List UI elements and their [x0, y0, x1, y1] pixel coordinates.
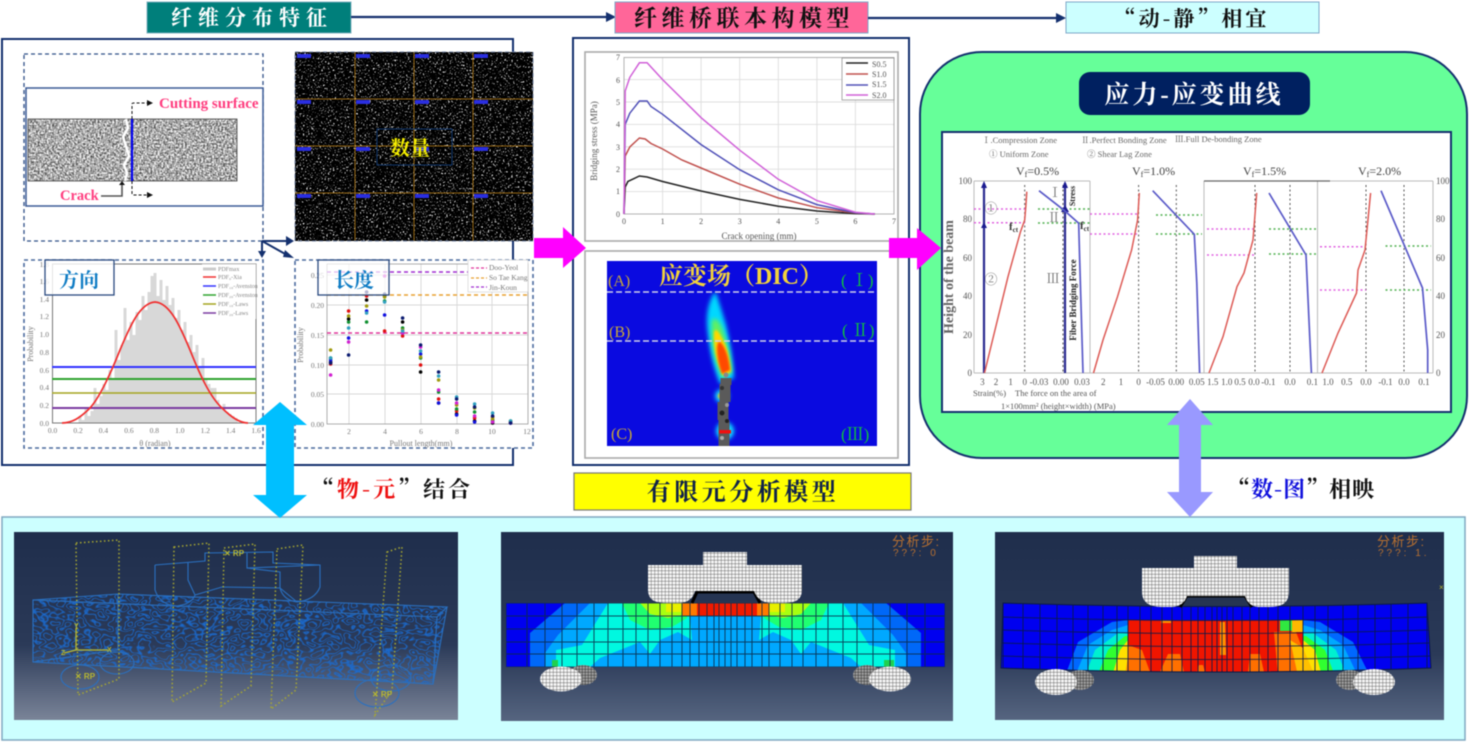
heading: fiber bridging constitutive model: 纤维桥联本构模型 [634, 6, 854, 31]
chart: length probability: 0.20 [311, 301, 324, 310]
chart: orientation probability: 1.0 [40, 330, 49, 339]
chart: height of the beam vs strain: f [1009, 221, 1013, 233]
chart: height of the beam vs strain: Ⅰ.Compression Zone [982, 135, 1057, 145]
chart: orientation probability: 1.4 [40, 295, 49, 304]
arrow: to bridging model [351, 12, 616, 22]
chart: orientation probability: 0.2 [73, 426, 83, 435]
chart: length probability: 0.00 [311, 420, 324, 429]
image: fiber wireframe model: Z [61, 650, 66, 657]
chart: height of the beam vs strain: 0.5 [1234, 377, 1246, 387]
label: quantity [377, 129, 452, 165]
label: length: 长度 [334, 268, 374, 292]
image: fiber wireframe model: Y [74, 623, 79, 630]
chart: height of the beam vs strain: =2.0% [1369, 164, 1401, 178]
chart: length probability: 12 [523, 427, 531, 436]
heading: stress strain curve: 应力-应变曲线 [1104, 80, 1284, 109]
chart: height of the beam vs strain: Ⅲ [1046, 271, 1060, 286]
chart: length probability: 4 [383, 427, 387, 436]
image: fiber wireframe model: ✕ RP [75, 672, 96, 681]
chart: bridging stress vs crack opening: 7 [616, 53, 620, 62]
chart: orientation probability: PDF₂₀-Avenston [218, 293, 258, 299]
chart: height of the beam vs strain: Fiber Bridging Force [1068, 259, 1078, 341]
chart: height of the beam vs strain [942, 132, 1451, 412]
heading: dynamic static: “动-静”相宜 [1115, 3, 1269, 33]
chart: orientation probability: PDF₂₀-Laws [218, 311, 249, 317]
panel: finite element models [2, 517, 1465, 740]
chart: length probability: 2 [347, 427, 351, 436]
chart: orientation probability: 0.4 [99, 426, 108, 435]
chart: height of the beam vs strain: 1.0 [1322, 377, 1334, 387]
chart: height of the beam vs strain: 0.00 [1053, 377, 1069, 387]
chart: orientation probability: 0.8 [150, 426, 159, 435]
image: fiber wireframe model [14, 532, 458, 720]
chart: length probability: So Tae Kang [489, 273, 528, 282]
chart: height of the beam vs strain: The force on the area of [1015, 388, 1097, 398]
chart: height of the beam vs strain: 60 [963, 253, 972, 263]
heading: stress strain curve [1079, 72, 1310, 115]
chart: bridging stress vs crack opening: S0.5 [872, 60, 886, 69]
chart: bridging stress vs crack opening: 0 [622, 217, 626, 226]
chart: bridging stress vs crack opening: 0 [616, 210, 620, 219]
chart: height of the beam vs strain: =0.5% [1027, 164, 1059, 178]
chart: bridging stress vs crack opening: 3 [616, 143, 620, 152]
chart: height of the beam vs strain: f [1367, 170, 1370, 179]
chart: height of the beam vs strain: ② [984, 272, 998, 287]
chart: height of the beam vs strain: Ⅲ.Full De-bonding Zone [1175, 134, 1262, 144]
chart: length probability: 6 [419, 427, 423, 436]
chart: length probability: 8 [455, 427, 459, 436]
chart: length probability: 0.15 [311, 331, 324, 340]
diagram: cutting surface and crack: Cutting surface [159, 96, 259, 112]
chart: height of the beam vs strain: Strain(%) [973, 388, 1006, 398]
chart: orientation probability: Probability [26, 326, 35, 362]
image: FE model final step: × [1439, 583, 1444, 592]
chart: height of the beam vs strain: Ⅰ [1048, 185, 1062, 200]
image: DIC strain field: (A) [608, 273, 630, 290]
image: DIC strain field [585, 251, 898, 458]
chart: orientation probability: 0.4 [40, 383, 49, 392]
chart: orientation probability: PDF₁₀-Laws [218, 302, 249, 308]
chart: height of the beam vs strain: ② Shear Lag Zone [1087, 149, 1152, 159]
chart: bridging stress vs crack opening: 5 [616, 98, 620, 107]
chart: height of the beam vs strain: 0 [1022, 377, 1027, 387]
chart: orientation probability: PDF₁₀-Avenston [218, 284, 258, 290]
chart: height of the beam vs strain: 1.0 [1221, 377, 1233, 387]
chart: orientation probability [24, 260, 263, 448]
image: fiber wireframe model: ✕ RP [224, 549, 245, 558]
chart: orientation probability: PDFmax [218, 267, 239, 273]
image: FE model final step [995, 532, 1444, 720]
chart: height of the beam vs strain: 60 [1436, 253, 1446, 263]
chart: height of the beam vs strain: 80 [1436, 214, 1446, 224]
chart: height of the beam vs strain: 40 [963, 291, 972, 301]
chart: height of the beam vs strain: 20 [963, 330, 972, 340]
image: fiber wireframe model: ✕ RP [372, 690, 393, 699]
chart: height of the beam vs strain: =1.0% [1143, 164, 1175, 178]
chart: bridging stress vs crack opening: 6 [616, 76, 620, 85]
image: FE model initial step [501, 532, 953, 721]
image: DIC strain field: ( Ⅱ) [842, 321, 875, 340]
label: orientation: 方向 [59, 269, 99, 292]
chart: orientation probability: 0.6 [124, 426, 134, 435]
chart: height of the beam vs strain: Stress [1068, 186, 1077, 206]
chart: height of the beam vs strain: =1.5% [1254, 164, 1286, 178]
chart: height of the beam vs strain: 40 [1436, 291, 1446, 301]
arrows: branching to charts [258, 236, 294, 258]
chart: height of the beam vs strain: 0 [1136, 377, 1141, 387]
chart: height of the beam vs strain: f [1252, 170, 1255, 179]
chart: orientation probability: 1.2 [201, 426, 210, 435]
chart: height of the beam vs strain: ① [984, 201, 998, 216]
chart: height of the beam vs strain: -0.05 [1146, 377, 1165, 387]
chart: length probability: Probability [296, 327, 305, 363]
chart: length probability: Doo-Yeol [489, 263, 518, 272]
chart: height of the beam vs strain: 0.0 [1284, 377, 1296, 387]
chart: height of the beam vs strain: 0.0 [1248, 377, 1260, 387]
chart: orientation probability: 0.6 [40, 366, 49, 375]
heading: fiber distribution [147, 2, 351, 33]
chart: length probability: 0.10 [311, 361, 324, 370]
diagram: cutting surface and crack: Crack [60, 188, 100, 204]
image: FE model final step: 分析步: [1377, 534, 1426, 549]
chart: height of the beam vs strain: 0.1 [1418, 377, 1430, 387]
chart: orientation probability: PDF₀-Xia [218, 275, 242, 281]
chart: height of the beam vs strain: ① Uniform Zone [989, 149, 1049, 159]
chart: orientation probability: 1.8 [40, 260, 49, 269]
chart: orientation probability: 0.0 [40, 419, 49, 428]
panel: fiber distribution [2, 39, 533, 465]
arrow: blue double vertical [253, 402, 307, 518]
image: FE model initial step: 分析步: [892, 534, 941, 549]
chart: height of the beam vs strain: 1×100mm² (height×width) (MPa) [1001, 401, 1116, 411]
chart: height of the beam vs strain: ct [1013, 226, 1019, 234]
arrow: lavender double vertical [1167, 399, 1213, 517]
image: fiber count [295, 52, 533, 241]
chart: bridging stress vs crack opening [585, 52, 898, 241]
chart: height of the beam vs strain: Ⅱ [1047, 210, 1061, 225]
chart: height of the beam vs strain: 0.5 [1341, 377, 1353, 387]
chart: bridging stress vs crack opening: 4 [776, 217, 780, 226]
chart: bridging stress vs crack opening: 6 [853, 217, 857, 226]
label: length [318, 260, 389, 295]
chart: height of the beam vs strain: V [1243, 164, 1252, 178]
chart: bridging stress vs crack opening: 1 [661, 217, 665, 226]
image: DIC strain field: (B) [609, 324, 630, 341]
label: object-element combination: “物-元”结合 [312, 473, 473, 504]
chart: height of the beam vs strain: V [1016, 164, 1025, 178]
chart: length probability [295, 260, 533, 448]
chart: height of the beam vs strain: 2 [1101, 377, 1106, 387]
chart: height of the beam vs strain: 0 [968, 368, 972, 378]
chart: height of the beam vs strain: ct [1084, 225, 1090, 233]
chart: height of the beam vs strain: Height of the beam [942, 220, 957, 334]
chart: height of the beam vs strain: 0.00 [1168, 377, 1185, 387]
chart: bridging stress vs crack opening: S1.0 [872, 70, 886, 79]
chart: orientation probability: 1.4 [226, 426, 236, 435]
chart: height of the beam vs strain: f [1025, 170, 1028, 179]
chart: bridging stress vs crack opening: 3 [738, 217, 742, 226]
chart: height of the beam vs strain: 2 [994, 377, 998, 387]
chart: orientation probability: 1.2 [40, 312, 49, 321]
chart: bridging stress vs crack opening: S1.5 [872, 80, 886, 89]
chart: height of the beam vs strain: 0.1 [1307, 377, 1318, 387]
chart: height of the beam vs strain: 0.0 [1360, 377, 1372, 387]
chart: height of the beam vs strain: -0.1 [1261, 377, 1276, 387]
chart: height of the beam vs strain: 1.5 [1207, 377, 1219, 387]
panel: stress strain [920, 52, 1467, 458]
chart: bridging stress vs crack opening: S2.0 [872, 91, 886, 100]
chart: bridging stress vs crack opening: 1 [616, 187, 620, 196]
chart: bridging stress vs crack opening: 4 [616, 120, 620, 129]
panel: bridging model [573, 38, 909, 465]
chart: height of the beam vs strain: 3 [980, 377, 985, 387]
heading: finite element model [574, 473, 911, 510]
chart: orientation probability: 1.6 [251, 426, 261, 435]
chart: height of the beam vs strain: 100 [1436, 176, 1450, 186]
chart: height of the beam vs strain: 0.0 [1398, 377, 1410, 387]
chart: bridging stress vs crack opening: 7 [892, 217, 896, 226]
label: orientation [45, 260, 114, 295]
chart: length probability: 0.25 [311, 271, 324, 280]
chart: bridging stress vs crack opening: 2 [699, 217, 703, 226]
chart: height of the beam vs strain: Ⅱ.Perfect Bonding Zone [1081, 135, 1167, 145]
chart: length probability: 10 [488, 427, 496, 436]
chart: orientation probability: 0.8 [40, 348, 49, 357]
label: quantity: 数量 [390, 137, 430, 160]
image: DIC strain field: (C) [611, 426, 632, 443]
chart: length probability: 0.05 [311, 390, 324, 399]
chart: orientation probability: θ (radian) [139, 439, 171, 448]
arrow: magenta to bridging model [534, 227, 586, 268]
image: DIC strain field: (Ⅲ) [841, 425, 869, 444]
chart: length probability: Jin-Koun [489, 283, 517, 292]
arrow: to dynamic-static [868, 13, 1066, 23]
image: FE model initial step: ???: 0 [893, 548, 939, 559]
chart: bridging stress vs crack opening: 2 [616, 165, 620, 174]
chart: height of the beam vs strain: 100 [958, 176, 972, 186]
image: DIC strain field: 应变场（DIC） [659, 262, 823, 290]
chart: height of the beam vs strain: f [1080, 220, 1084, 232]
chart: height of the beam vs strain: 0.05 [1189, 377, 1205, 387]
chart: height of the beam vs strain: f [1141, 170, 1144, 179]
heading: finite element model: 有限元分析模型 [647, 478, 839, 506]
chart: orientation probability: 1.0 [175, 426, 185, 435]
heading: fiber distribution: 纤维分布特征 [171, 6, 333, 30]
chart: bridging stress vs crack opening: Bridging stress (MPa) [589, 101, 599, 181]
chart: bridging stress vs crack opening: 5 [815, 217, 819, 226]
chart: length probability: Pullout length(mm) [390, 439, 453, 448]
chart: height of the beam vs strain: 20 [1436, 330, 1446, 340]
chart: height of the beam vs strain: -0.1 [1378, 377, 1393, 387]
chart: height of the beam vs strain: -0.03 [1030, 377, 1049, 387]
arrow: magenta to stress strain [889, 228, 941, 270]
chart: height of the beam vs strain: 1 [1119, 377, 1123, 387]
chart: height of the beam vs strain: 1 [1008, 377, 1013, 387]
chart: orientation probability: 1.6 [40, 277, 49, 286]
chart: height of the beam vs strain: V [1132, 164, 1141, 178]
image: FE model final step: ???: 1. [1378, 548, 1430, 559]
heading: dynamic static [1066, 2, 1319, 33]
image: DIC strain field: ( Ⅰ) [841, 271, 874, 290]
chart: height of the beam vs strain: 0 [1436, 368, 1441, 378]
label: data-graph mapping: “数-图”相映 [1228, 473, 1375, 504]
image: fiber wireframe model: X [107, 647, 112, 654]
diagram: cutting surface and crack [24, 54, 263, 241]
chart: bridging stress vs crack opening: Crack opening (mm) [722, 231, 796, 241]
chart: orientation probability: 0.0 [48, 426, 57, 435]
chart: orientation probability: 0.2 [40, 401, 49, 410]
chart: height of the beam vs strain: 80 [963, 214, 972, 224]
chart: height of the beam vs strain: V [1358, 164, 1367, 178]
chart: height of the beam vs strain: 0.03 [1074, 377, 1090, 387]
